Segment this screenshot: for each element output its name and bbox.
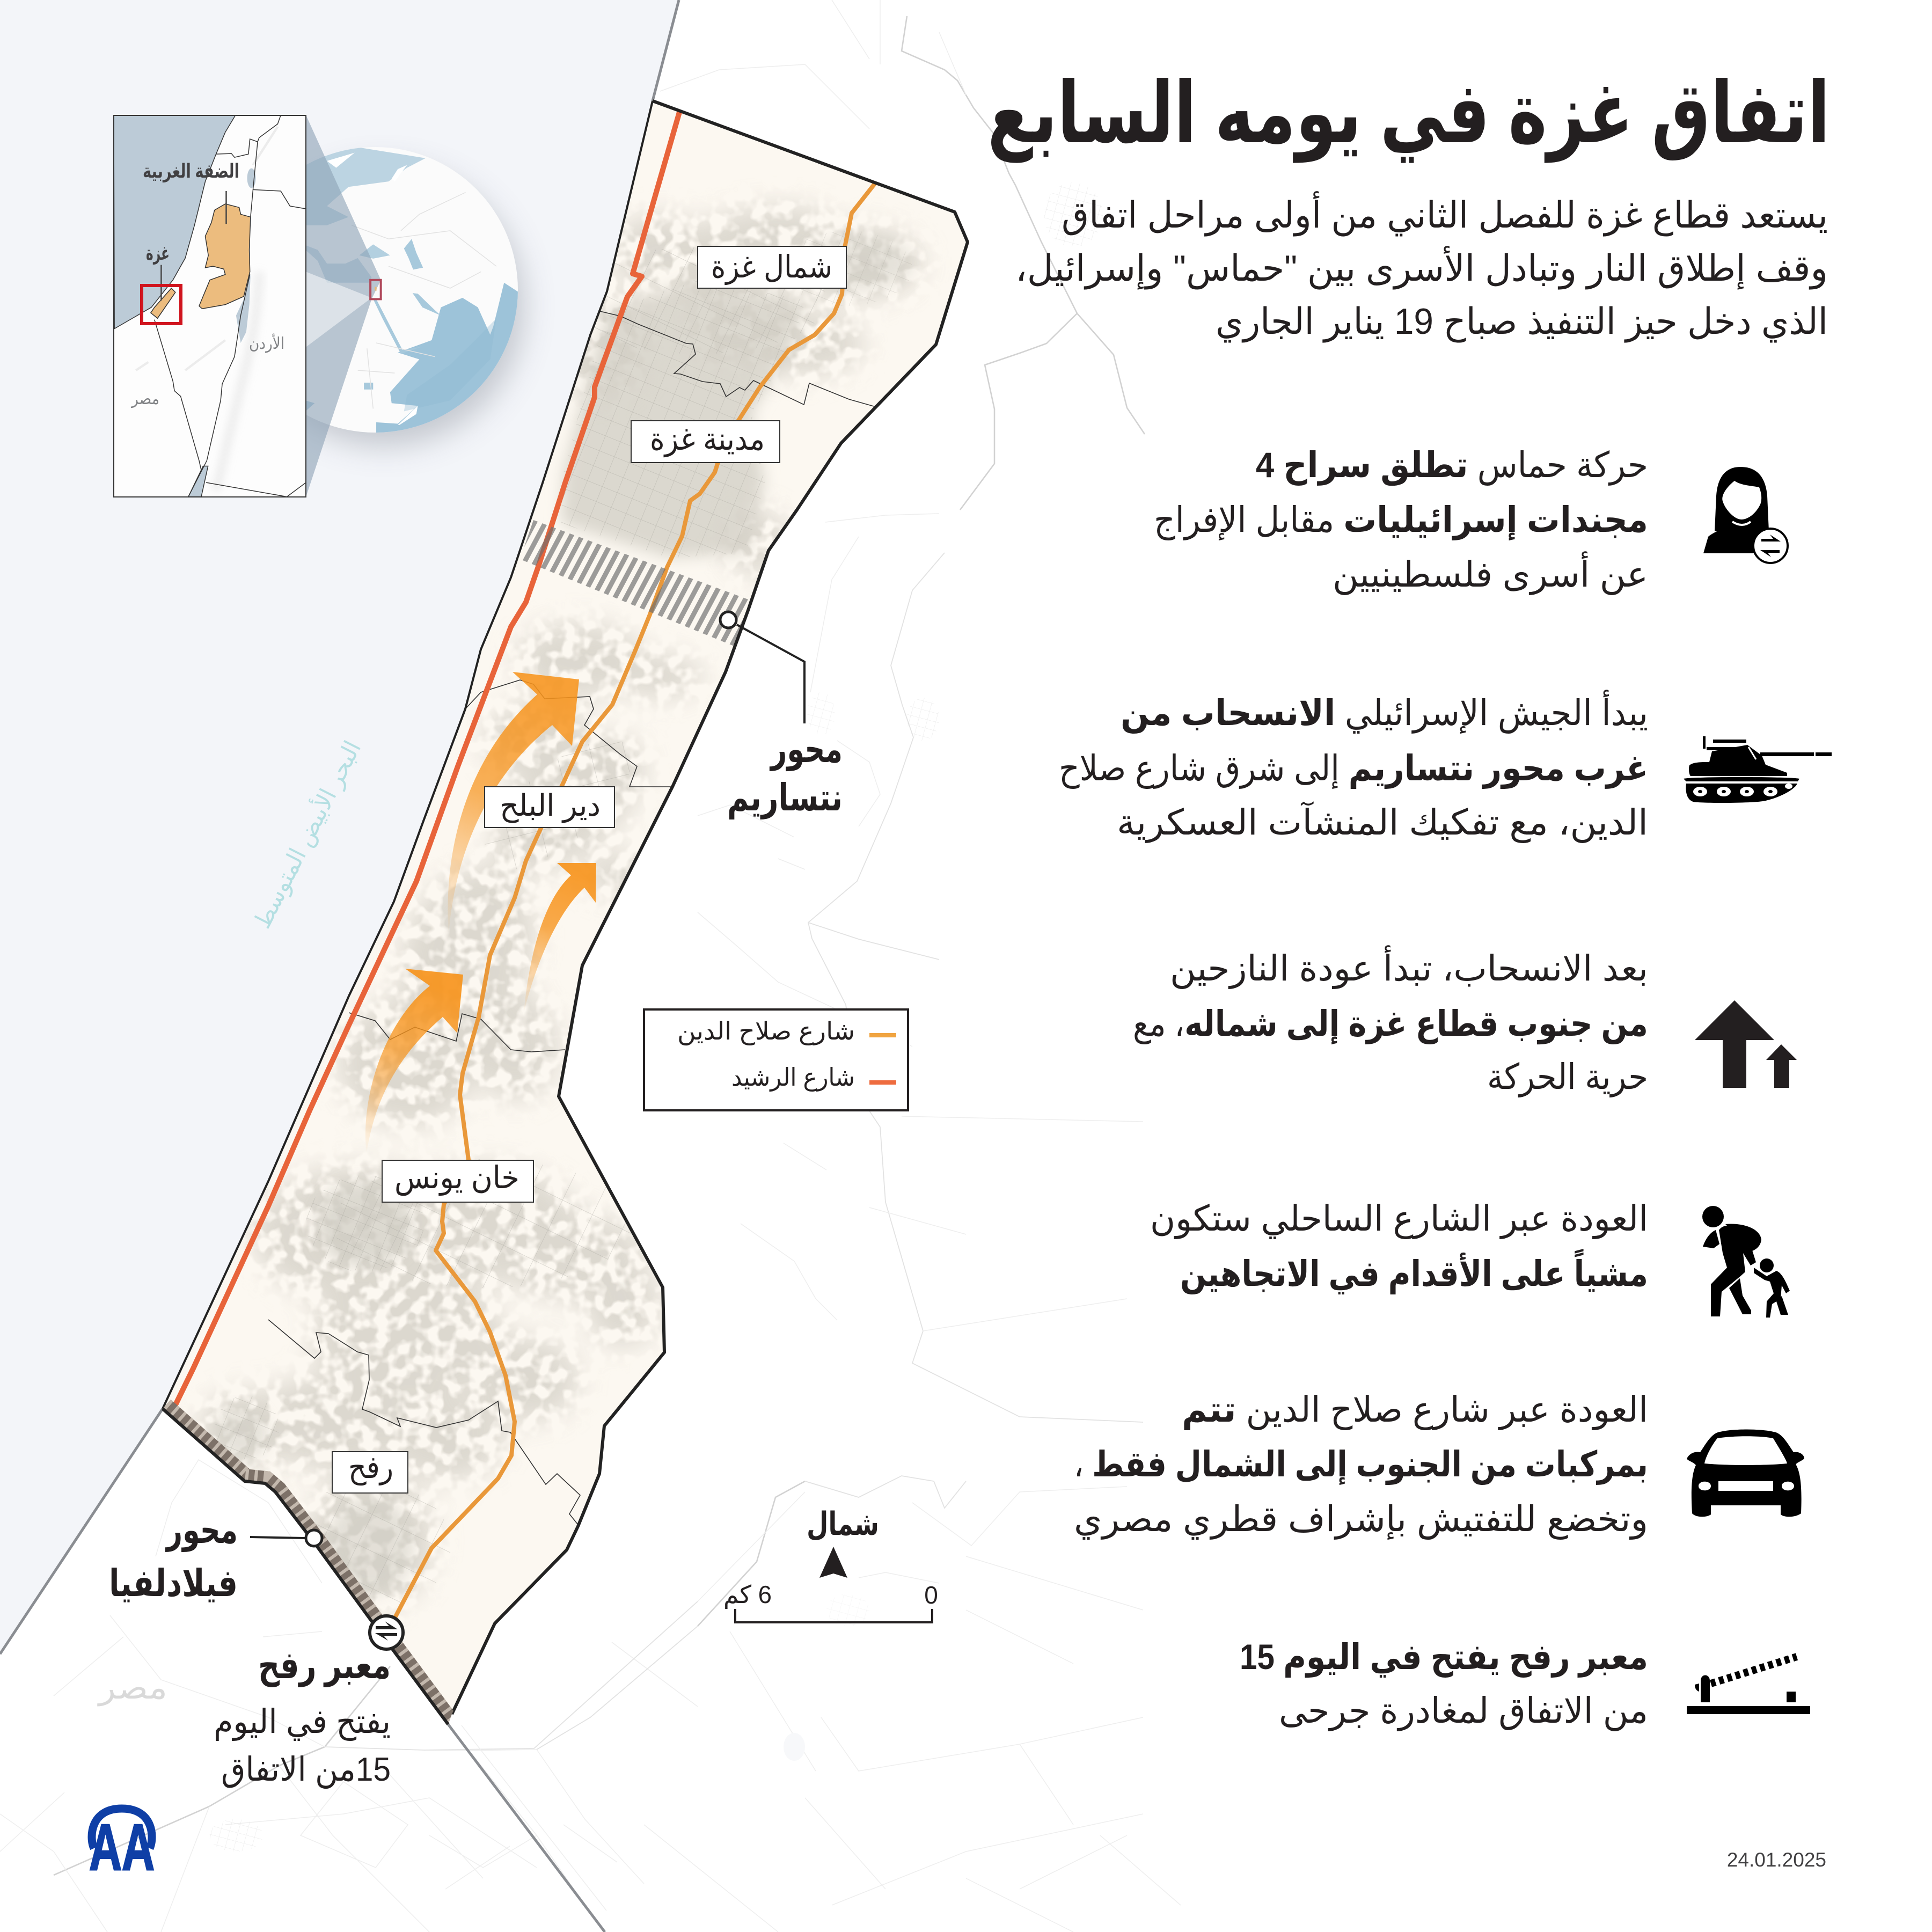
terrain relief [216, 272, 259, 491]
Caspian and Black seas [404, 239, 423, 269]
callout: Rafah crossing [214, 1616, 403, 1789]
icon: adult and child walking [1702, 1206, 1790, 1318]
road: Al-Rashid [171, 112, 679, 1415]
item 2: withdrawal: الدين، مع تفكيك المنشآت العسكرية [1117, 801, 1648, 843]
legend: شارع صلاح الدين [677, 1017, 855, 1046]
item 1: hostages: عن أسرى فلسطينيين [1333, 551, 1648, 595]
red locator box [142, 286, 181, 324]
Netzarim corridor hatch [520, 520, 750, 647]
item 5: vehicles: العودة عبر شارع صلاح الدين تتم [1182, 1389, 1648, 1430]
item 2: withdrawal: يبدأ الجيش الإسرائيلي الانسحاب من [1121, 690, 1648, 734]
item 2: withdrawal: غرب محور نتساريم إلى شرق شارع صلاح [1059, 748, 1648, 789]
Philadelphi corridor [163, 1409, 448, 1724]
item 2: withdrawal [1059, 690, 1832, 843]
city label: North Gaza: شمال غزة [711, 250, 832, 286]
intro paragraph: يستعد قطاع غزة للفصل الثاني من أولى مراحل اتفاق [1062, 191, 1828, 237]
icon: up arrows [1695, 1000, 1797, 1088]
intro paragraph: الذي دخل حيز التنفيذ صباح 19 يناير الجاري [1216, 301, 1828, 343]
city label: Gaza City: مدينة غزة [650, 422, 765, 458]
callout: Netzarim corridor: نتساريم [727, 777, 843, 819]
scale bar: 0 [924, 1581, 938, 1609]
leader lines [161, 191, 226, 301]
callout: Rafah crossing: يفتح في اليوم [214, 1703, 391, 1741]
inset map: Palestine: مصر [130, 390, 159, 408]
legend: شارع الرشيد [731, 1063, 855, 1092]
city label: Rafah: رفح [348, 1450, 393, 1485]
logo: Anadolu Agency: AA [89, 1811, 155, 1884]
callout: Netzarim corridor: محور [770, 728, 843, 771]
icon: car [1687, 1430, 1804, 1517]
item 4: walking: العودة عبر الشارع الساحلي ستكون [1150, 1198, 1648, 1239]
item 3: return of displaced [1133, 945, 1797, 1097]
item 5: vehicles: بمركبات من الجنوب إلى الشمال فقط ، [1074, 1444, 1648, 1485]
item 1: hostages: مجندات إسرائيليات مقابل الإفراج [1154, 500, 1648, 541]
item 3: return of displaced: بعد الانسحاب، تبدأ عودة النازحين [1170, 945, 1648, 989]
scale bar [723, 1580, 938, 1622]
callout: Netzarim corridor [720, 612, 843, 819]
sea in inset [114, 115, 236, 328]
country borders [352, 192, 496, 408]
item 5: vehicles [1074, 1389, 1804, 1540]
Gaza in inset [151, 288, 175, 318]
item 6: Rafah opening: من الاتفاق لمغادرة جرحى [1279, 1690, 1648, 1731]
callout: Philadelphi corridor [109, 1509, 322, 1604]
map: Gaza Strip [162, 99, 969, 1725]
icon: tank [1684, 736, 1832, 803]
locator globe [306, 116, 538, 495]
icon: exchange arrows in circle [370, 1616, 403, 1649]
item 3: return of displaced: حرية الحركة [1487, 1057, 1648, 1097]
Arctic and Atlantic [302, 147, 426, 225]
date: 24.01.2025 [1727, 1849, 1826, 1871]
item 6: Rafah opening [1240, 1637, 1810, 1731]
movement arrows [365, 672, 596, 1154]
label: Mediterranean Sea: البحر الأبيض المتوسط [247, 736, 367, 933]
background roads [0, 0, 1181, 1932]
city label: Deir al-Balah [485, 787, 614, 828]
road: Salah al-Din [394, 183, 875, 1619]
icon: barrier [1687, 1657, 1810, 1714]
item 1: hostages [1154, 445, 1788, 595]
item 4: walking [1150, 1198, 1790, 1318]
legend [644, 1009, 908, 1110]
city label: Deir al-Balah: دير البلح [500, 788, 601, 823]
inset map: Palestine: غزة [146, 242, 170, 265]
Mediterranean [306, 246, 371, 283]
north arrow: شمال [807, 1506, 879, 1542]
intro paragraph: وقف إطلاق النار وتبادل الأسرى بين "حماس" وإسرائيل، [1015, 246, 1828, 290]
Indian Ocean [376, 283, 521, 442]
sea [0, 0, 679, 1654]
inset map: Palestine: الضفة الغربية [143, 160, 239, 182]
inset map: Palestine [114, 115, 306, 497]
item 6: Rafah opening: معبر رفح يفتح في اليوم 15 [1240, 1637, 1648, 1678]
item 1: hostages: حركة حماس تطلق سراح 4 [1256, 445, 1648, 486]
intro paragraph [1015, 191, 1828, 343]
inset map: Palestine: الأردن [249, 333, 284, 353]
item 3: return of displaced: من جنوب قطاع غزة إلى شماله، مع [1133, 1004, 1648, 1045]
logo: Anadolu Agency [89, 1809, 155, 1884]
label: Egypt: مصر [97, 1670, 167, 1707]
inset and coast border lines [0, 0, 679, 1932]
strip outline [452, 101, 968, 1714]
governorate boundaries [268, 311, 874, 1525]
Red Sea and Gulf [373, 299, 421, 354]
borders [155, 115, 306, 497]
strip territory [163, 101, 968, 1724]
callout: Philadelphi corridor: فيلادلفيا [109, 1562, 238, 1604]
item 4: walking: مشياً على الأقدام في الاتجاهين [1180, 1248, 1648, 1295]
West Bank [199, 204, 251, 309]
callout: Rafah crossing: معبر رفح [258, 1644, 391, 1687]
city label: Rafah [332, 1450, 408, 1493]
scale bar: 6 كم [723, 1580, 772, 1609]
callout: Rafah crossing: 15من الاتفاق [221, 1751, 391, 1789]
zoom cone [306, 115, 381, 497]
urban areas [193, 196, 930, 1615]
item 5: vehicles: وتخضع للتفتيش بإشراف قطري مصري [1074, 1499, 1648, 1540]
north arrow [807, 1506, 879, 1578]
lakes and gulfs [247, 169, 256, 188]
callout: Philadelphi corridor: محور [165, 1509, 238, 1552]
city label: Khan Younis: خان يونس [394, 1160, 519, 1196]
icon: woman with exchange badge [1703, 467, 1788, 563]
coastline [163, 101, 653, 1409]
